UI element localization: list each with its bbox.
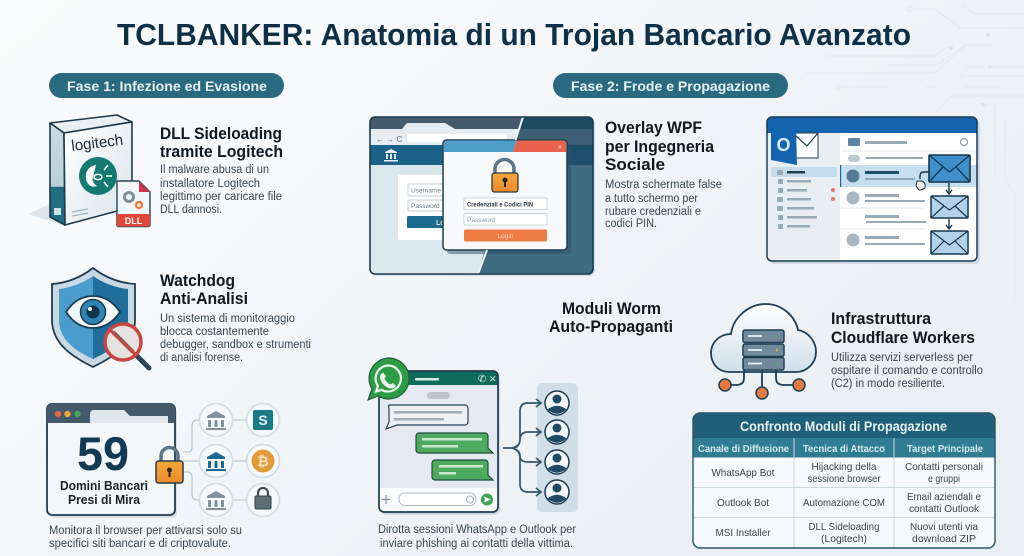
text block: cloudflare workers: Utilizza servizi serverless per xyxy=(831,352,973,364)
panel: whatsapp chat illustration: ✕ xyxy=(489,374,497,384)
text block: watchdog: Un sistema di monitoraggio xyxy=(160,313,295,325)
table: confronto moduli: (Logitech) xyxy=(821,533,867,545)
text block: dll sideloading xyxy=(160,125,283,216)
heading: moduli worm: Moduli Worm xyxy=(562,300,661,318)
icon: whatsapp logo xyxy=(368,358,409,400)
forwarded envelopes xyxy=(916,155,970,254)
legit browser half xyxy=(370,117,523,274)
table: confronto moduli: download ZIP xyxy=(912,533,976,545)
table: confronto moduli: e gruppi xyxy=(928,473,960,485)
panel: contacts xyxy=(537,383,578,512)
text block: watchdog xyxy=(160,272,311,364)
icon: logitech software box: logitech xyxy=(70,132,124,155)
fake login dialog: × xyxy=(558,143,563,152)
icon: dll file xyxy=(117,181,150,226)
table: confronto moduli: contatti Outlook xyxy=(909,503,980,515)
text block: overlay wpf: Overlay WPF xyxy=(605,119,702,137)
table: confronto moduli: Nuovi utenti via xyxy=(910,521,978,533)
text block: watchdog: Anti-Analisi xyxy=(160,290,248,308)
panel: overlay browser illustration: ← → C xyxy=(376,135,402,144)
icon: bank and crypto targets: S xyxy=(258,412,268,428)
text block: overlay wpf: a tutto schermo per xyxy=(605,193,698,205)
panel: whatsapp chat illustration: ✆ xyxy=(478,374,486,385)
heading: moduli worm: Auto-Propaganti xyxy=(549,318,673,336)
text block: dll sideloading: DLL dannosi. xyxy=(160,204,222,216)
text block: cloudflare workers: Cloudflare Workers xyxy=(831,329,975,347)
fake login dialog: Login xyxy=(498,233,514,240)
panel: 59 domini bancari: Presi di Mira xyxy=(68,493,141,507)
text block: watchdog: Watchdog xyxy=(160,272,235,290)
text block: overlay wpf: Mostra schermate false xyxy=(605,179,722,191)
table: confronto moduli: MSI Installer xyxy=(716,527,771,539)
panel: overlay browser illustration: Password xyxy=(411,203,440,210)
text block: dirotta sessioni: Dirotta sessioni WhatsApp e Outlook per xyxy=(378,524,576,536)
heading: fase 1 pill: Fase 1: Infezione ed Evasione xyxy=(67,78,267,94)
text block: overlay wpf: codici PIN. xyxy=(605,218,657,230)
text block: overlay wpf: per Ingegneria xyxy=(605,138,715,156)
text block: watchdog: blocca costantemente xyxy=(160,326,269,338)
panel: 59 domini bancari: 59 xyxy=(77,427,129,480)
text block: dirotta sessioni: inviare phishing ai contatti della vittima. xyxy=(380,538,573,550)
icon: logitech software box xyxy=(28,115,132,226)
icon: padlock xyxy=(156,448,183,483)
text block: watchdog: di analisi forense. xyxy=(160,352,243,364)
table: confronto moduli: Canale di Diffusione xyxy=(698,443,789,455)
text block: dll sideloading: Il malware abusa di un xyxy=(160,164,269,176)
title: TCLBANKER: Anatomia di un Trojan Bancario Avanzato xyxy=(117,18,911,52)
panel: 59 domini bancari xyxy=(47,404,177,518)
panel: 59 domini bancari: Domini Bancari xyxy=(60,479,148,493)
icon: cloud server xyxy=(711,304,816,399)
icon: dll file: DLL xyxy=(125,216,143,226)
table: confronto moduli: Contatti personali xyxy=(905,461,983,473)
outlook logo xyxy=(771,124,818,165)
fake login dialog: Password xyxy=(467,217,496,224)
text block: cloudflare workers: Infrastruttura xyxy=(831,310,932,328)
text block: overlay wpf: rubare credenziali e xyxy=(605,206,701,218)
table: confronto moduli: Outlook Bot xyxy=(717,497,769,509)
table: confronto moduli: sessione browser xyxy=(808,473,881,485)
icon: watchdog shield xyxy=(52,268,135,367)
text block: watchdog: debugger, sandbox e strumenti xyxy=(160,339,311,351)
icon: bank and crypto targets: ₿ xyxy=(257,453,269,469)
panel: overlay browser illustration: Username xyxy=(411,188,441,194)
panel: overlay browser illustration xyxy=(370,117,595,276)
text block: dirotta sessioni xyxy=(378,524,576,550)
text block: overlay wpf: Sociale xyxy=(605,156,665,174)
icon: bank and crypto targets xyxy=(200,404,280,516)
outlook logo: O xyxy=(776,135,791,155)
table: confronto moduli: Confronto Moduli di Propagazione xyxy=(740,419,947,434)
text block: dll sideloading: tramite Logitech xyxy=(160,143,283,161)
text block: monitoraggio browser xyxy=(49,525,242,550)
contact avatars xyxy=(545,391,569,504)
text block: dll sideloading: legittimo per caricare file xyxy=(160,191,282,203)
panel: outlook window illustration xyxy=(767,117,980,264)
icon: magnifier with prohibited tools xyxy=(105,324,149,368)
text block: cloudflare workers xyxy=(831,310,983,390)
heading: fase 2 pill: Fase 2: Frode e Propagazione xyxy=(571,78,770,94)
text block: monitoraggio browser: Monitora il browser per attivarsi solo su xyxy=(49,525,242,537)
table: confronto moduli: Automazione COM xyxy=(803,497,885,509)
diagram: domain connectors xyxy=(183,420,246,500)
table: confronto moduli xyxy=(693,413,995,548)
table: confronto moduli: Tecnica di Attacco xyxy=(803,443,885,455)
table: confronto moduli: WhatsApp Bot xyxy=(712,467,775,479)
text block: monitoraggio browser: specifici siti bancari e di criptovalute. xyxy=(49,538,231,550)
text block: dll sideloading: installatore Logitech xyxy=(160,178,260,190)
fake login dialog xyxy=(443,140,567,250)
heading: fase 1 pill xyxy=(49,73,284,98)
heading: moduli worm xyxy=(549,300,673,336)
fake dark half xyxy=(478,117,593,274)
panel: overlay browser illustration: Lo xyxy=(436,220,445,227)
table: confronto moduli: Target Principale xyxy=(907,443,983,455)
diagram: contacts fan-out arrows xyxy=(503,399,541,496)
chat bubbles xyxy=(386,405,493,480)
heading: fase 2 pill xyxy=(553,73,788,98)
text block: cloudflare workers: (C2) in modo resiliente. xyxy=(831,378,945,390)
fake login dialog: Credenziali e Codici PIN xyxy=(467,202,533,208)
text block: cloudflare workers: ospitare il comando e controllo xyxy=(831,365,983,377)
panel: whatsapp chat illustration xyxy=(379,371,500,515)
text block: overlay wpf xyxy=(605,119,722,230)
table: confronto moduli: Email aziendali e xyxy=(907,491,981,503)
table: confronto moduli: Hijacking della xyxy=(812,461,877,473)
table: confronto moduli: DLL Sideloading xyxy=(808,521,880,533)
text block: dll sideloading: DLL Sideloading xyxy=(160,125,282,143)
